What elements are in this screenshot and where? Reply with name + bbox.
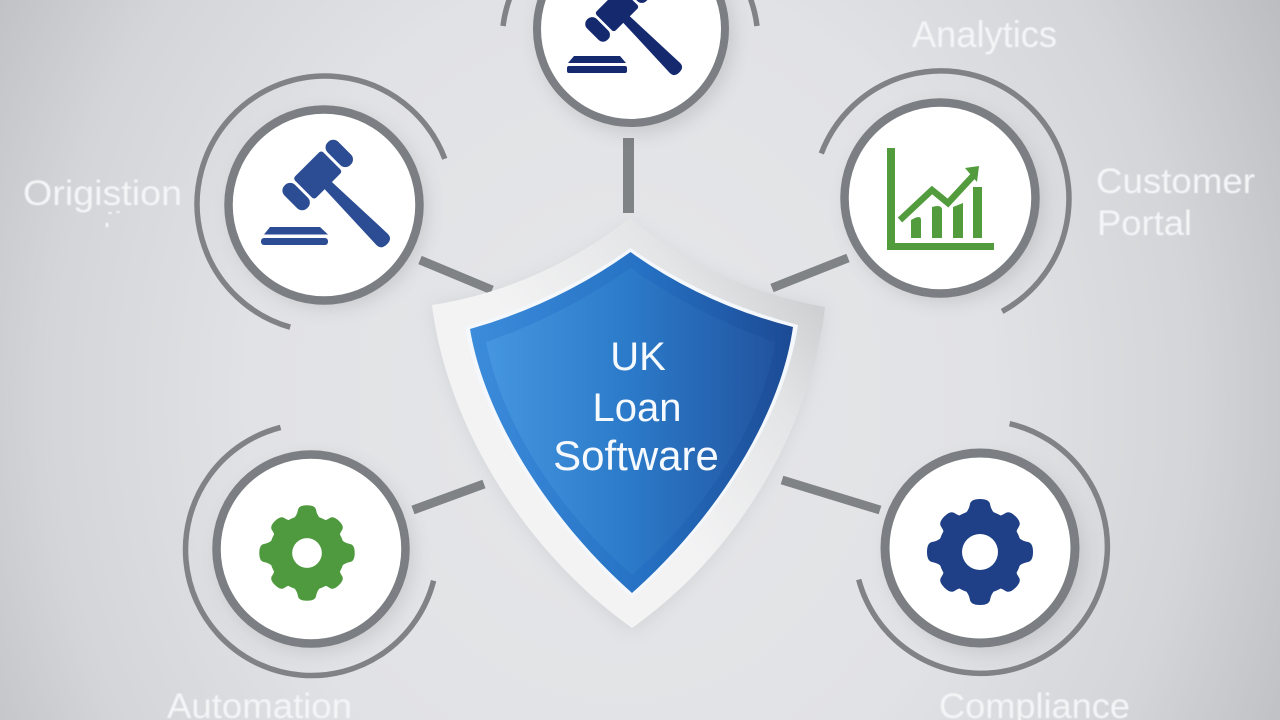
label: origination (23, 174, 182, 228)
connector lines (413, 138, 880, 510)
shield title: UK (610, 335, 666, 379)
node: analytics chart (821, 71, 1069, 311)
icon: green gear (259, 505, 355, 601)
icon: growth chart (887, 148, 994, 250)
icon: gavel (261, 137, 414, 271)
node: origination gavel (197, 76, 445, 327)
icon: blue gear (927, 499, 1033, 605)
shield title: Software (553, 432, 719, 479)
label: analytics: Analytics (912, 14, 1057, 55)
node: compliance gear (859, 424, 1107, 673)
label: origination: Origistion (23, 174, 182, 213)
central shield (432, 218, 825, 632)
shield title: Loan (593, 386, 681, 430)
shield title (553, 335, 719, 479)
node: top gavel (503, 0, 757, 134)
label: customer portal: Portal (1097, 204, 1192, 243)
node: automation gear (186, 427, 434, 676)
icon: top gavel (567, 0, 704, 97)
label: customer portal: Customer (1096, 162, 1255, 201)
label: customer portal (1096, 162, 1255, 243)
